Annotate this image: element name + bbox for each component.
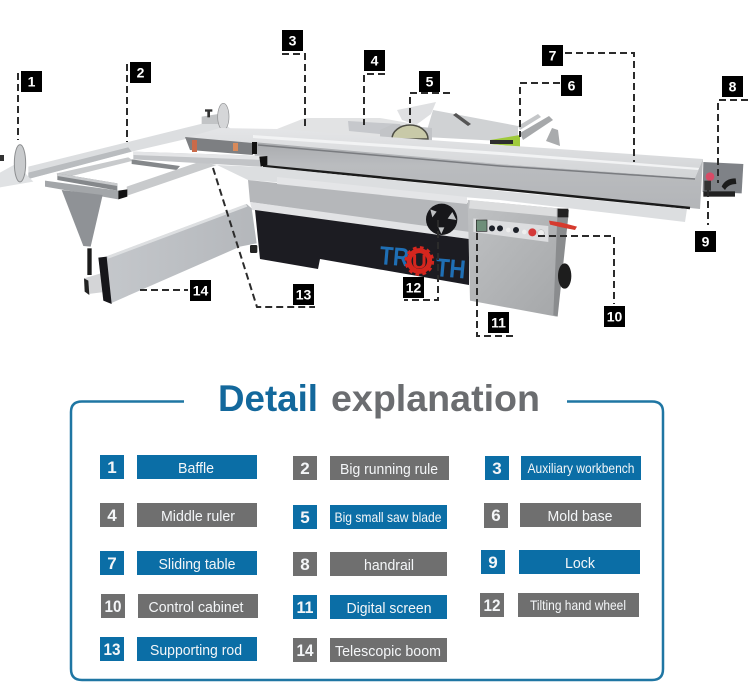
heading [218,378,540,419]
crosscut front arm [127,162,217,196]
badge 3: 3 [289,32,297,48]
legend 14 Telescopic boom [293,638,447,662]
badge 13 [293,284,314,305]
mitre stop at rail end [202,103,229,130]
legend 13 Supporting rod: 13 [104,640,120,659]
table groove [263,166,690,208]
baffle disc [0,145,26,182]
legend 4 Middle ruler: 4 [107,506,117,525]
crosscut long bar [133,152,267,167]
legend 1 Baffle: Baffle [178,460,214,477]
auxiliary workbench back surface [277,118,420,145]
telescopic boom [98,204,257,304]
panel frame [71,402,663,680]
badge 14 [190,280,211,301]
legend 6 Mold base: 6 [491,506,501,525]
machine: left fence, crosscut table and boom [0,103,231,187]
table edge dark line [258,145,695,179]
control panel [473,218,548,242]
legend 11 Digital screen: 11 [296,598,314,617]
legend 7 Sliding table [100,551,257,575]
strip under table [217,165,687,222]
legend 5 Big small saw blade [293,505,447,529]
mold base [490,135,520,147]
badge 9: 9 [702,234,710,250]
handrail handle [722,178,736,190]
legend 2 Big running rule: 2 [300,459,310,478]
control cabinet [468,200,567,317]
rip fence [425,110,518,142]
legend 9 Lock: 9 [488,553,498,572]
legend 8 handrail [293,552,447,576]
heading: explanation [331,378,540,419]
middle ruler [348,121,400,136]
legend 4 Middle ruler: Middle ruler [161,508,235,525]
badge 4 [364,50,385,71]
rip fence rods [453,113,560,146]
back of table with ruler, blade and fence [277,102,560,147]
legend 14 Telescopic boom: 14 [296,641,314,660]
badge 2: 2 [137,64,145,80]
cabinet side [553,208,569,317]
tilting hand wheel [426,204,457,235]
legend 1 Baffle [100,455,257,479]
rod and foot [84,248,107,295]
logo TRUTH [378,240,467,285]
cabinet black top corner [558,209,568,217]
legend 2 Big running rule [293,456,449,480]
badge 13: 13 [296,286,311,302]
legend 10 Control cabinet [101,594,258,618]
badge 6: 6 [568,78,576,94]
badge 10: 10 [607,308,622,324]
body light band [277,177,467,204]
badge 12: 12 [406,280,421,296]
badge 5 [419,71,440,92]
legend 6 Mold base [484,503,641,528]
badge 14: 14 [193,282,208,298]
legend 9 Lock [481,550,640,574]
table top highlight [253,135,700,170]
legend 4 Middle ruler [100,503,257,527]
black knob [558,263,571,289]
rail lower face [28,147,132,179]
badge 4: 4 [371,52,379,68]
triangular support [62,190,103,247]
legend 3 Auxiliary workbench: 3 [492,459,502,478]
badge 5: 5 [426,74,434,90]
badge 2 [130,62,151,83]
badge 7 [542,45,563,66]
crosscut front bar with roller [45,173,127,199]
legend 10 Control cabinet: Control cabinet [148,599,244,616]
lock [703,172,735,197]
badge 8: 8 [729,78,737,94]
red handle [549,221,577,230]
badge 9 [695,231,716,252]
fence stub at left edge [0,163,33,187]
black base [255,210,469,285]
body lower strip [250,202,470,239]
machine: right end, logo, wheel and cabinet [378,162,743,317]
logo TRUTH: U [412,251,427,274]
crosscut table and boom [45,152,267,304]
badge 12 [403,277,424,298]
badge 10 [604,306,625,327]
logo TRUTH: TR [378,240,411,273]
saw blade guard [397,102,436,125]
logo TRUTH: TH [434,252,467,285]
legend 6 Mold base: Mold base [548,508,612,525]
leader lines [18,53,748,336]
legend 5 Big small saw blade: 5 [300,508,310,527]
legend 9 Lock: Lock [565,555,595,572]
legend 3 Auxiliary workbench [485,456,641,480]
fence end block [703,162,743,193]
legend 3 Auxiliary workbench: Auxiliary workbench [528,460,634,476]
legend 8 handrail: 8 [300,555,310,574]
dark section of table side with clamps [185,137,257,155]
badge 11 [488,312,509,333]
crosscut rear arm [57,157,133,179]
table top surface [185,128,703,178]
legend 7 Sliding table: 7 [107,554,117,573]
saw blade [380,124,432,142]
legend 7 Sliding table: Sliding table [158,556,236,573]
badge 7: 7 [549,48,557,64]
legend 8 handrail: handrail [364,557,414,574]
legend 12 Tilting hand wheel: Tilting hand wheel [530,597,626,613]
legend 14 Telescopic boom: Telescopic boom [335,643,441,660]
badge 1: 1 [28,74,36,90]
legend 2 Big running rule: Big running rule [340,461,438,478]
legend 13 Supporting rod [100,637,257,661]
table side [253,142,703,209]
legend 12 Tilting hand wheel: 12 [484,596,500,615]
badge 11: 11 [491,314,506,330]
badge 8 [722,76,743,97]
legend 11 Digital screen: Digital screen [346,600,432,617]
legend 5 Big small saw blade: Big small saw blade [334,509,442,525]
crosscut inner bar [132,159,180,170]
big running rule rail [28,122,231,179]
legend 13 Supporting rod: Supporting rod [150,642,242,659]
machine body silver [248,180,470,233]
badge 1 [21,71,42,92]
badge 3 [282,30,303,51]
legend 1 Baffle: 1 [107,458,117,477]
legend 12 Tilting hand wheel [480,593,639,617]
cabinet top strip [469,200,557,217]
heading: Detail [218,378,318,419]
legend 10 Control cabinet: 10 [104,597,122,616]
callout badges on machine [21,30,743,333]
legend 11 Digital screen [293,595,447,619]
badge 6 [561,75,582,96]
